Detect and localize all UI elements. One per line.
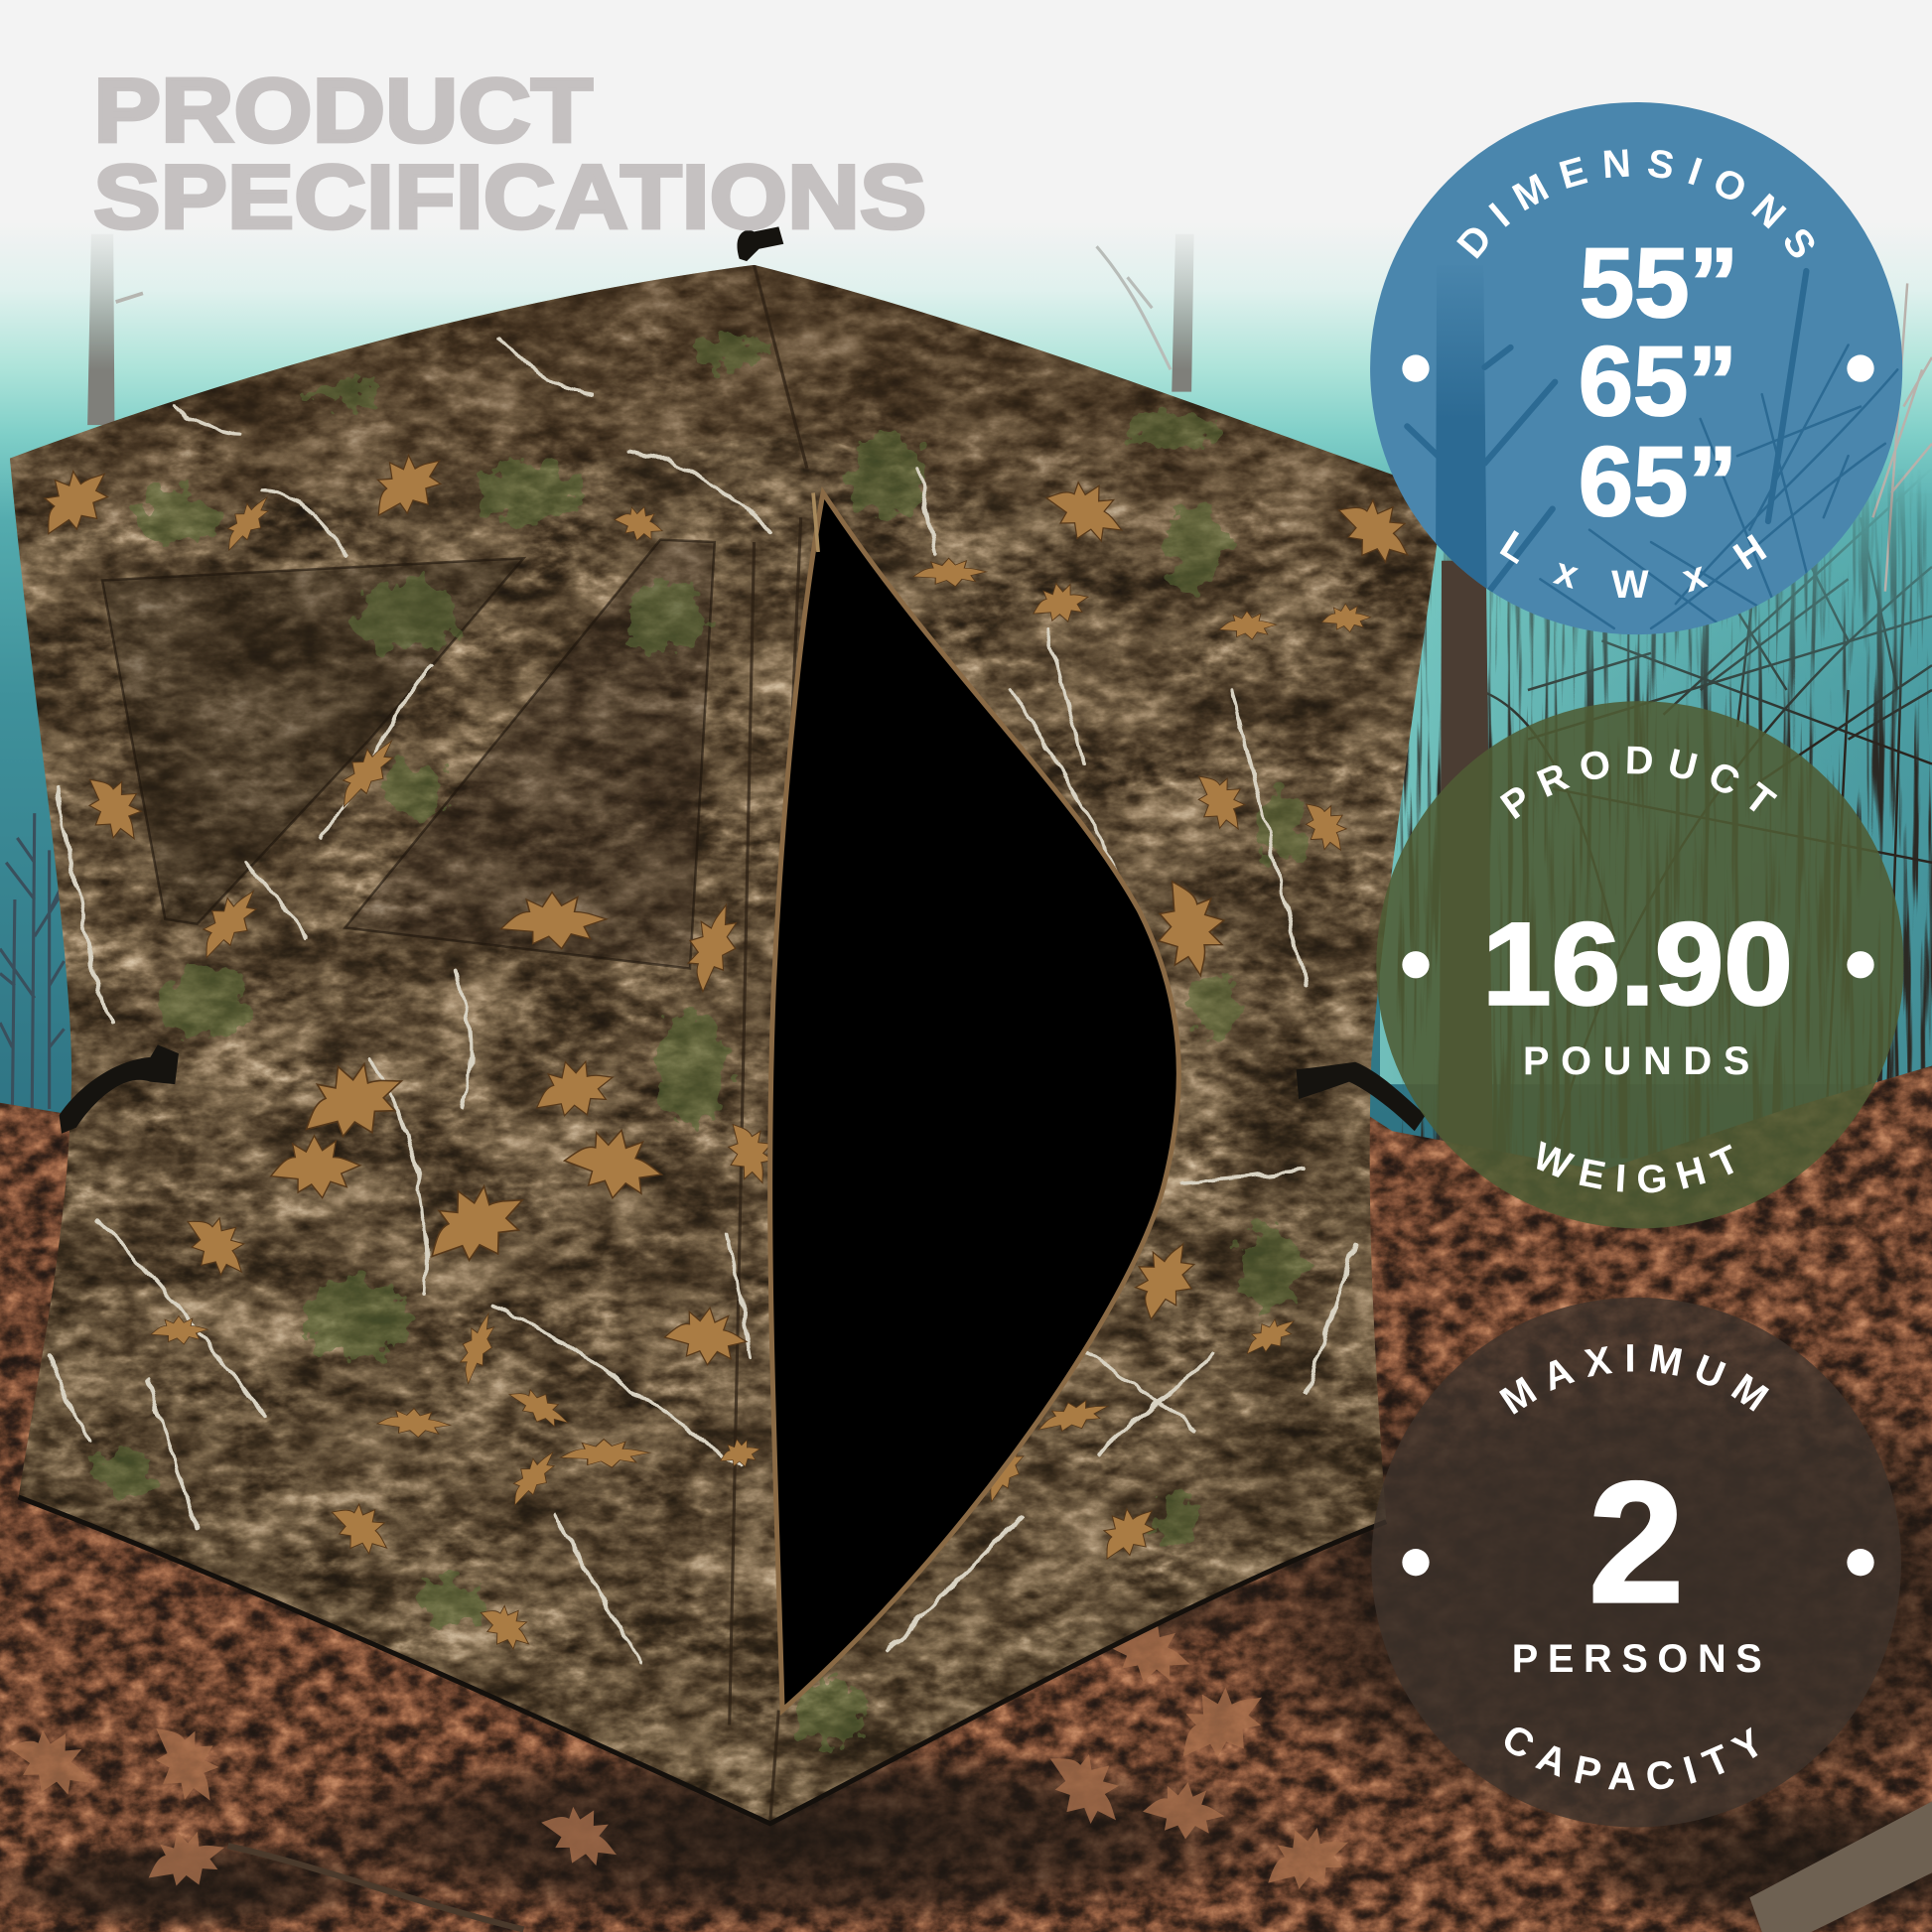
door seam lines: [730, 265, 807, 1824]
value: weight: 16.90: [1482, 897, 1793, 1029]
forest floor: [0, 1059, 1932, 1932]
dot left: [1402, 1549, 1430, 1576]
white twigs: [50, 339, 1355, 1663]
lighter sky behind right forest: [1380, 492, 1932, 1084]
curved label: dimensions: DIMENSIONS: [1456, 149, 1815, 259]
right guy strap: [1297, 1062, 1426, 1131]
value: length: 55”: [1580, 228, 1738, 339]
unit: persons: PERSONS: [1512, 1637, 1762, 1681]
title: SPECIFICATIONS: [93, 148, 926, 248]
curved label: product: PRODUCT: [1499, 747, 1777, 820]
title: PRODUCT: [93, 62, 593, 162]
value: persons: 2: [1588, 1446, 1684, 1638]
door drawcord: [813, 492, 818, 552]
tent fabric: [0, 246, 1453, 1836]
fallen branch: [228, 1846, 523, 1930]
door opening: [770, 492, 1178, 1711]
foreground tree trunk: [1440, 561, 1493, 1182]
badge: product weight: [1376, 701, 1904, 1229]
fallen log: [1749, 1801, 1932, 1932]
value: width: 65”: [1579, 327, 1737, 437]
dot left: [1402, 951, 1430, 978]
title: [93, 62, 926, 248]
fallen leaves: [0, 1605, 1359, 1903]
curved label: weight: WEIGHT: [1537, 1141, 1733, 1193]
badge disc: [1376, 701, 1903, 1228]
left guy strap: [60, 1044, 179, 1134]
roof shading: [10, 265, 1426, 570]
forest on the right: [1392, 469, 1932, 1171]
green foliage: [96, 334, 1304, 1744]
bottom edge hem: [19, 1497, 1386, 1824]
camouflage base: [0, 246, 1453, 1836]
dot right: [1847, 951, 1874, 978]
curved label: capacity: CAPACITY: [1505, 1727, 1757, 1791]
oak leaves: [25, 439, 1425, 1660]
hunting blind tent: [0, 226, 1453, 1836]
curved label: maximum: MAXIMUM: [1499, 1344, 1769, 1415]
trees seen through disc: [1407, 265, 1897, 628]
distant trees: [0, 234, 1932, 1109]
dot right: [1847, 354, 1874, 382]
dot right: [1847, 1549, 1874, 1576]
window panel left: [102, 558, 523, 924]
value: height: 65”: [1579, 427, 1737, 537]
badge disc: [1371, 1298, 1901, 1828]
top loop strap: [737, 226, 783, 261]
dark soil patches: [0, 1343, 1932, 1932]
unit: pounds: POUNDS: [1523, 1039, 1749, 1083]
badge: maximum capacity: [1372, 1297, 1901, 1827]
dot left: [1402, 354, 1430, 382]
badge disc: [1370, 102, 1902, 634]
curved label: L x W x H: L x W x H: [1499, 530, 1767, 598]
badge: dimensions: [1370, 102, 1902, 635]
leaf litter texture: [0, 1059, 1932, 1932]
window panel right: [345, 540, 715, 968]
